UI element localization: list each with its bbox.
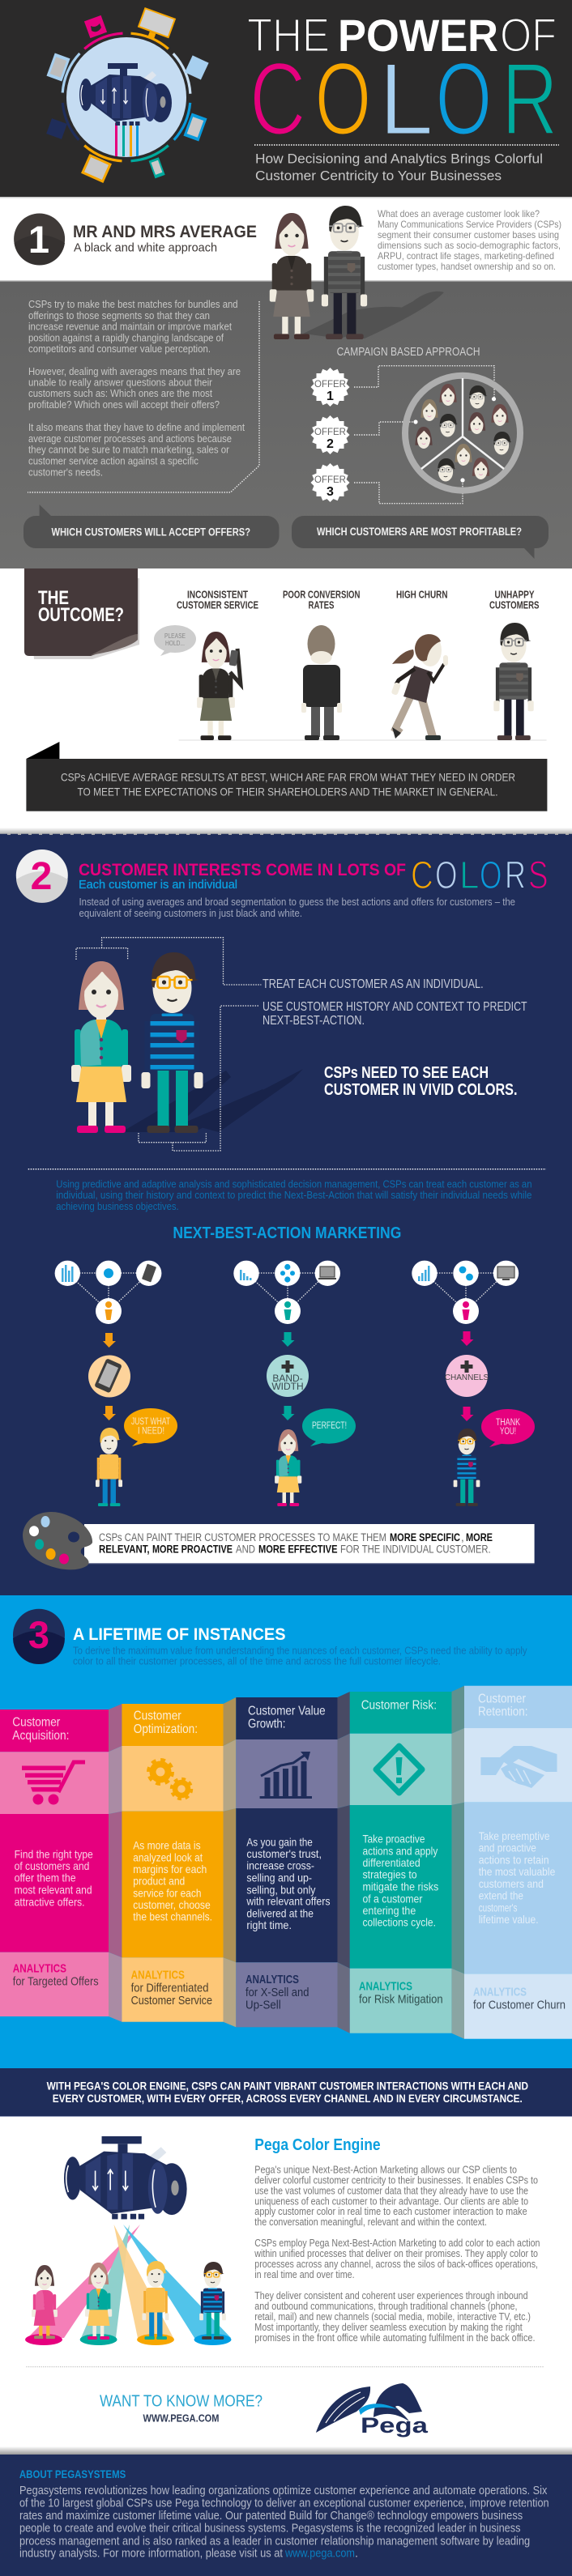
panel: the outcome (0, 568, 572, 828)
callout: vivid colors: CSPs NEED TO SEE EACH (324, 1064, 489, 1082)
icon: offer 2 (310, 415, 350, 454)
text: predictive analysis (56, 1178, 532, 1212)
panel: campaign approach (0, 280, 572, 568)
panel: customer risk: actions and apply (363, 1844, 438, 1857)
panel: customer acquisition: offer them the (15, 1871, 76, 1884)
panel: customer risk: differentiated (363, 1856, 420, 1869)
panel: customer retention: lifetime value. (479, 1913, 539, 1926)
heading: customer interests: O (435, 854, 457, 897)
text: averages explanation: It also means that they have to define and implement (28, 421, 245, 433)
panel: customer optimization: the best channels. (133, 1910, 212, 1923)
heading: customer interests: S (528, 854, 549, 897)
labels: outcomes: CUSTOMER SERVICE (177, 600, 258, 611)
figure: woman on phone (154, 625, 241, 740)
text: pega description: They deliver consistent and coherent user experiences through inbound (254, 2290, 528, 2301)
panel: customer risk: entering the (363, 1904, 416, 1917)
text: pega description (254, 2164, 540, 2344)
diagram: next-best-action column 2: PERFECT! (312, 1421, 347, 1431)
heading: customer interests (79, 854, 549, 897)
logo: pega (316, 2383, 429, 2438)
illustration: engine with color beams (25, 2136, 232, 2345)
panel: customer value growth: customer's trust, (246, 1847, 322, 1860)
panel: customer optimization: customer, choose (133, 1898, 211, 1911)
panel: customer retention: customers and (479, 1877, 544, 1890)
heading: customer interests: C (411, 854, 433, 897)
text: averages explanation: offerings to those segments so that they can (28, 309, 210, 321)
heading: customer interests: CUSTOMER INTERESTS COME IN LOTS OF (79, 861, 406, 879)
icon: number 1 (14, 214, 65, 266)
labels: outcomes: RATES (308, 600, 334, 611)
callout: paint processes: MORE SPECIFIC (390, 1531, 460, 1543)
chart: customer pie with segments (405, 376, 520, 491)
panel: customer retention: actions to retain (479, 1853, 549, 1866)
panel: customer value growth: delivered at the (246, 1906, 314, 1919)
panel: customer optimization: product and (133, 1875, 185, 1888)
text: averages explanation: increase revenue and maintain or improve market (28, 321, 232, 333)
panel: customer risk: strategies to (363, 1868, 417, 1881)
panel: customer acquisition: Customer (12, 1716, 61, 1730)
subtitle: How Decisioning and Analytics Brings Colorful (255, 151, 543, 167)
callout: accept offers (23, 505, 279, 548)
text: about (19, 2484, 549, 2561)
callout: paint processes: CSPs CAN PAINT THEIR CUSTOMER PROCESSES TO MAKE THEM (99, 1531, 386, 1543)
panel: customer acquisition: Acquisition: (12, 1729, 69, 1743)
labels: outcomes: CUSTOMERS (489, 600, 540, 611)
heading: mr and mrs average (73, 223, 257, 254)
text: want to know more (100, 2393, 263, 2425)
figure: unhappy man (493, 623, 534, 740)
panel: customer risk: of a customer (363, 1892, 423, 1905)
icon: offer 3: OFFER (314, 475, 346, 485)
heading: next-best-action marketing: NEXT-BEST-ACTION MARKETING (173, 1224, 401, 1242)
panel: customer acquisition: ANALYTICS (13, 1962, 66, 1976)
heading: the outcome tag (24, 568, 139, 659)
text: average customer: What does an average customer look like? (378, 208, 540, 219)
text: averages explanation: unable to really answer questions about their (28, 377, 213, 389)
panel: customer optimization: analyzed look at (133, 1850, 203, 1863)
title: the power of: THE (247, 10, 330, 62)
heading: the outcome tag: THE (38, 587, 69, 609)
panel: section 3 lifetime of instances (0, 1595, 572, 2068)
icon: growth chart (260, 1752, 312, 1799)
diagram: next-best-action column 2: WIDTH (271, 1381, 304, 1392)
heading: mr and mrs average: MR AND MRS AVERAGE (73, 223, 257, 241)
heading: customer interests: L (459, 854, 480, 897)
panel: customer acquisition: for Targeted Offers (13, 1975, 99, 1989)
panel: customer retention: Customer (478, 1692, 527, 1706)
text: predictive analysis: achieving business objectives. (56, 1200, 179, 1212)
panel: customer value growth: As you gain the (246, 1835, 313, 1848)
text: pega description: uniqueness of each customer to their advantage. Our clients are able to (254, 2195, 528, 2207)
icon: offer 2: OFFER (314, 428, 346, 437)
panel: customer acquisition: most relevant and (15, 1883, 92, 1896)
icon: offer 1: OFFER (314, 380, 346, 390)
panel: customer value growth: Growth: (248, 1717, 285, 1731)
heading: customer interests: Each customer is an individual (79, 878, 237, 892)
icon: offer 3: 3 (327, 485, 334, 499)
text: average customer (378, 208, 561, 272)
icon: number 3: 3 (28, 1613, 49, 1656)
panel: customer risk: Take proactive (363, 1833, 425, 1846)
logo: pega: Pega (361, 2413, 429, 2438)
title: the power of: OF (500, 10, 557, 62)
text: averages explanation: customers such as: Which ones are the most (28, 387, 212, 399)
panel: customer value growth: selling and up- (246, 1871, 312, 1884)
diagram: next-best-action column 1 (55, 1261, 177, 1506)
icon: shopping cart (22, 1762, 85, 1804)
diagram: next-best-action column 2: BAND- (272, 1373, 303, 1384)
icon: color engine ring (36, 6, 217, 188)
callout: vivid colors (324, 1064, 517, 1099)
figure: woman on phone: PLEASE (164, 632, 186, 640)
panel: customer optimization: service for each (133, 1886, 201, 1899)
panel: header (0, 0, 572, 197)
panel: customer risk (350, 1692, 451, 2033)
labels: outcomes (177, 590, 540, 611)
heading: customer interests: O (480, 854, 502, 897)
panel: customer risk: mitigate the risks (363, 1880, 438, 1893)
title: color: O (314, 41, 371, 156)
diagram: next-best-action column 1: JUST WHAT (131, 1417, 170, 1427)
text: instead of averages: Instead of using averages and broad segmentation to guess the best actions and offers for customers – the (79, 896, 515, 908)
text: lifetime intro (73, 1645, 527, 1667)
diagram: next-best-action column 3: YOU! (500, 1427, 516, 1437)
text: pega description: retail, mail) and new channels (social media, mobile, interactive TV, etc.) (254, 2311, 531, 2323)
panel: customer optimization: As more data is (133, 1839, 201, 1852)
text: averages explanation: customer service action against a specific (28, 455, 198, 467)
heading: customer interests: R (505, 854, 526, 897)
panel: customer value growth: increase cross- (246, 1859, 314, 1872)
text: pega description: use the vast volumes of customer data that they already have to use the (254, 2185, 528, 2196)
panel: customer value growth (236, 1697, 337, 2027)
callout: paint processes: MORE (466, 1531, 493, 1543)
callout: paint processes: AND (236, 1543, 255, 1556)
figure: running woman (391, 634, 448, 740)
text: pega description: Most importantly, they deliver seamless execution by making the right (254, 2322, 523, 2333)
text: lifetime intro: color to all their customer processes, all of the time and across the full customer lifecycle. (73, 1655, 441, 1667)
banner: average results (26, 742, 547, 811)
callout: most profitable (292, 516, 549, 559)
text: about: industry analysts. For more information, please visit us at (19, 2548, 283, 2561)
title: color (250, 41, 558, 156)
callout: paint processes (23, 1512, 535, 1569)
panel: customer value growth: selling, but only (246, 1883, 316, 1896)
text: pega description: and outbound communications, through traditional channels (phone, (254, 2301, 517, 2312)
text: pega description: in real time and over time. (254, 2269, 355, 2280)
callout: accept offers: WHICH CUSTOMERS WILL ACCEPT OFFERS? (52, 526, 250, 539)
panel: customer optimization: Customer (134, 1709, 181, 1722)
panel: customer value growth: for X-Sell and (245, 1986, 309, 1999)
title: color: L (378, 41, 433, 156)
text: want to know more: WANT TO KNOW MORE? (100, 2393, 263, 2411)
text: averages explanation: competitors and consumer value perception. (28, 343, 211, 355)
text: averages explanation (28, 298, 245, 479)
banner: pega color engine statement (0, 2068, 572, 2117)
panel: customer value growth: with relevant offers (246, 1895, 331, 1908)
panel: customer retention: ANALYTICS (473, 1985, 527, 1999)
panel: customer acquisition: of customers and (15, 1859, 89, 1872)
panel: customer risk: ANALYTICS (359, 1980, 412, 1994)
text: individual treatment (263, 977, 527, 1028)
heading: campaign based approach: CAMPAIGN BASED APPROACH (337, 345, 480, 359)
panel: customer optimization: Optimization: (134, 1722, 198, 1736)
icon: offer 2: 2 (327, 437, 334, 451)
callout: paint processes: , (461, 1531, 464, 1543)
panel: customer retention: customer's (479, 1901, 517, 1914)
callout: vivid colors: CUSTOMER IN VIVID COLORS. (324, 1081, 517, 1099)
callout: most profitable: WHICH CUSTOMERS ARE MOST PROFITABLE? (317, 526, 522, 538)
panel: section 1 intro (0, 197, 572, 281)
illustration: mr and mrs average (270, 206, 444, 339)
callout: paint processes: MORE EFFECTIVE (258, 1543, 337, 1556)
text: averages explanation: profitable? Which ones will accept their offers? (28, 398, 220, 411)
icon: number 2: 2 (31, 855, 52, 898)
text: pega description: the conversation meaningful, relevant and within the context. (254, 2216, 487, 2228)
panel: customer value growth: right time. (246, 1918, 292, 1931)
title: the power of (247, 10, 557, 62)
text: individual treatment: NEXT-BEST-ACTION. (263, 1014, 365, 1028)
diagram: next-best-action column 3: CHANNELS (445, 1373, 489, 1382)
callout: paint processes: MORE PROACTIVE (152, 1543, 233, 1556)
panel: customer risk: Customer Risk: (361, 1699, 437, 1713)
panel: customer acquisition (0, 1710, 109, 2016)
panel: section 2 customer interests (0, 828, 572, 1595)
diagram: next-best-action column 3 (412, 1261, 535, 1506)
text: averages explanation: position against a rapidly changing landscape of (28, 332, 224, 344)
figure: woman on phone: HOLD... (165, 640, 185, 647)
panel: customer optimization: margins for each (133, 1863, 207, 1876)
text: averages explanation: CSPs try to make the best matches for bundles and (28, 298, 238, 310)
panel: customer retention: and proactive (479, 1842, 536, 1854)
panel: customer optimization: ANALYTICS (131, 1968, 185, 1982)
text: want to know more: WWW.PEGA.COM (143, 2412, 219, 2425)
text: about: . (355, 2548, 358, 2561)
icon: offer 1 (310, 368, 350, 407)
panel: customer value growth: Up-Sell (245, 1999, 281, 2012)
panel: customer retention (464, 1686, 572, 2039)
text: averages explanation: they cannot be sure to match marketing, sales or (28, 444, 230, 456)
labels: outcomes: POOR CONVERSION (283, 590, 360, 601)
heading: the outcome tag: OUTCOME? (38, 604, 124, 626)
title: color: C (250, 41, 306, 156)
icon: handshake (480, 1746, 557, 1788)
panel: customer retention: Take preemptive (479, 1829, 550, 1842)
column connectors (109, 1686, 464, 2039)
icon: offer 1: 1 (327, 390, 334, 403)
icon: warning diamond (376, 1746, 422, 1793)
icon: offer 3 (310, 463, 350, 502)
text: pega description: apply customer color in real time to each customer interaction to make (254, 2206, 527, 2217)
text: instead of averages: equivalent of seeing customers in just black and white. (79, 907, 302, 919)
icon: gears (149, 1761, 191, 1799)
text: averages explanation: average customer processes and actions because (28, 432, 232, 445)
icon: number 2 (16, 849, 68, 903)
panel: customer risk: for Risk Mitigation (359, 1993, 443, 2007)
panel: customer retention: Retention: (478, 1705, 528, 1719)
callout: paint processes: RELEVANT, (99, 1543, 150, 1556)
heading: a lifetime of instances: A LIFETIME OF INSTANCES (73, 1625, 285, 1644)
panel: customer optimization: Customer Service (131, 1994, 212, 2008)
icon: number 1: 1 (28, 218, 49, 261)
text: average customer: ARPU, contract life stages, marketing-defined (378, 250, 554, 262)
panel: pega color engine (0, 2117, 572, 2455)
callout: paint processes: FOR THE INDIVIDUAL CUSTOMER. (340, 1543, 491, 1556)
subtitle: Customer Centricity to Your Businesses (255, 168, 502, 183)
heading: mr and mrs average: A black and white approach (74, 241, 217, 254)
panel: customer value growth: ANALYTICS (245, 1973, 299, 1986)
diagram: next-best-action column 1: I NEED! (138, 1427, 164, 1437)
text: averages explanation: However, dealing with averages means that they are (28, 365, 241, 377)
labels: outcomes: INCONSISTENT (187, 590, 248, 601)
text: instead of averages (79, 896, 515, 919)
panel: customer retention: extend the (479, 1889, 523, 1902)
panel: customer risk: collections cycle. (363, 1915, 436, 1928)
heading: pega color engine: Pega Color Engine (254, 2136, 381, 2154)
text: averages explanation: customer's needs. (28, 466, 103, 479)
panel: about pegasystems (0, 2455, 572, 2576)
icon: number 3 (13, 1609, 65, 1664)
panel: customer optimization: for Differentiated (131, 1981, 209, 1995)
text: about: rates and maximize customer lifetime value. Our patented Build for Change® technology empowers business (19, 2510, 523, 2523)
subtitle (255, 151, 543, 183)
labels: outcomes: UNHAPPY (494, 590, 535, 601)
title: color: O (436, 41, 492, 156)
text: pega description: Pega's unique Next-Best-Action Marketing allows our CSP clients to (254, 2164, 517, 2175)
title: the power of: POWER (338, 10, 498, 61)
panel: customer acquisition: Find the right type (15, 1847, 93, 1860)
text: pega description: promises in the front office while automating fulfilment in the back office. (254, 2332, 535, 2344)
diagram: next-best-action column 2 (233, 1261, 356, 1506)
banner: average results: TO MEET THE EXPECTATIONS OF THEIR SHAREHOLDERS AND THE MARKET IN GENERAL. (78, 785, 497, 798)
figure: man from behind (301, 625, 342, 740)
icon: palette (23, 1512, 92, 1569)
heading: about pegasystems: ABOUT PEGASYSTEMS (19, 2467, 126, 2480)
text: individual treatment: TREAT EACH CUSTOMER AS AN INDIVIDUAL. (263, 977, 484, 991)
panel: customer retention: the most valuable (479, 1865, 555, 1878)
text: about: www.pega.com (284, 2548, 355, 2561)
diagram: next-best-action column 3: THANK (496, 1418, 520, 1428)
panel: customer optimization (122, 1704, 224, 2022)
illustration: colorful couple (71, 952, 303, 1133)
labels: outcomes: HIGH CHURN (396, 590, 447, 601)
panel: customer acquisition: attractive offers. (15, 1895, 85, 1908)
panel: customer value growth: Customer Value (248, 1704, 326, 1718)
